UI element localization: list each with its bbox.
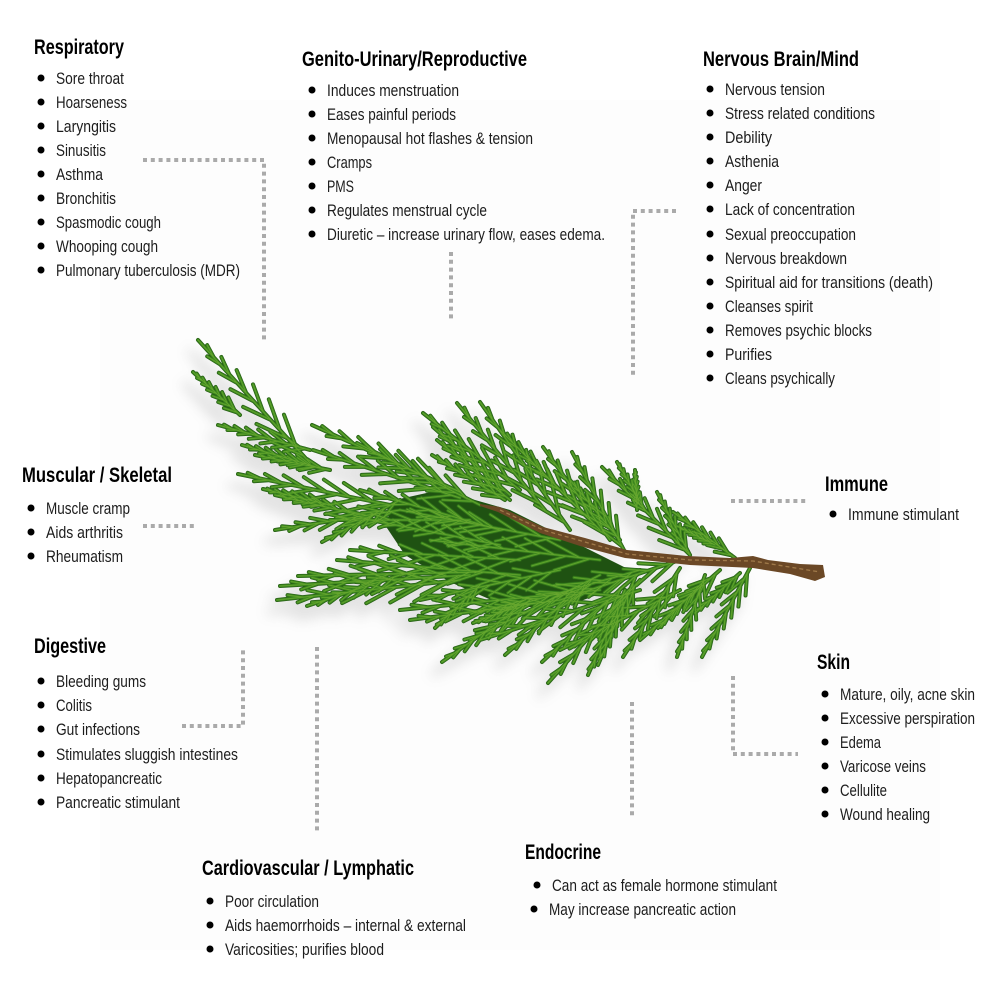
list: nervous: Stress related conditions — [725, 104, 875, 123]
panel: endocrine — [525, 841, 777, 919]
list: digestive: Hepatopancreatic — [56, 769, 162, 788]
connector: nervous — [633, 211, 676, 375]
connector: muscular — [143, 524, 194, 528]
list: nervous: Sexual preoccupation — [725, 225, 856, 244]
heading: genito-urinary: Genito-Urinary/Reproductive — [302, 48, 527, 71]
list: nervous — [706, 80, 933, 388]
panel: cardiovascular / lymphatic — [202, 857, 466, 959]
list: muscular: Rheumatism — [46, 547, 123, 566]
list: digestive: Pancreatic stimulant — [56, 793, 180, 812]
list: nervous: Nervous breakdown — [725, 249, 847, 268]
list: digestive: Colitis — [56, 696, 92, 715]
panel: digestive — [34, 635, 238, 812]
heading: nervous: Nervous Brain/Mind — [703, 48, 859, 71]
list: respiratory: Sinusitis — [56, 141, 106, 160]
list: respiratory: Hoarseness — [56, 93, 127, 112]
list: digestive: Stimulates sluggish intestines — [56, 745, 238, 764]
heading: cardiovascular: Cardiovascular / Lymphatic — [202, 857, 414, 880]
panel: immune — [825, 473, 959, 524]
list: genito-urinary: Regulates menstrual cycle — [327, 201, 487, 220]
list: skin — [822, 685, 975, 824]
list: skin: Edema — [840, 733, 881, 752]
list: endocrine: May increase pancreatic action — [549, 900, 736, 919]
list: respiratory: Pulmonary tuberculosis (MDR) — [56, 261, 240, 280]
list: nervous: Spiritual aid for transitions (death) — [725, 273, 933, 292]
list: muscular: Muscle cramp — [46, 499, 130, 518]
connector: digestive — [182, 647, 243, 726]
list: genito-urinary — [308, 81, 605, 244]
list: muscular — [28, 499, 130, 566]
heading: respiratory: Respiratory — [34, 36, 124, 59]
list: genito-urinary: Cramps — [327, 153, 372, 172]
list: nervous: Lack of concentration — [725, 200, 855, 219]
heading: endocrine: Endocrine — [525, 841, 601, 864]
heading: immune: Immune — [825, 473, 888, 496]
connector: immune — [731, 499, 806, 503]
heading: digestive: Digestive — [34, 635, 106, 658]
list: respiratory: Laryngitis — [56, 117, 116, 136]
list: nervous: Cleans psychically — [725, 369, 835, 388]
plant: cypress sprig — [179, 331, 825, 703]
list: endocrine: Can act as female hormone stimulant — [552, 876, 777, 895]
list: nervous: Anger — [725, 176, 762, 195]
list: nervous: Debility — [725, 128, 772, 147]
list: cardiovascular: Poor circulation — [225, 892, 319, 911]
list: cardiovascular: Aids haemorrhoids – internal & external — [225, 916, 466, 935]
panel: skin — [817, 651, 975, 824]
list: digestive: Gut infections — [56, 720, 140, 739]
connector: endocrine — [630, 702, 634, 818]
list: nervous: Purifies — [725, 345, 772, 364]
list: respiratory — [38, 69, 240, 280]
list: genito-urinary: Eases painful periods — [327, 105, 456, 124]
list: digestive — [38, 672, 238, 812]
list: digestive: Bleeding gums — [56, 672, 146, 691]
list: nervous: Removes psychic blocks — [725, 321, 872, 340]
connector: respiratory — [143, 160, 264, 341]
list: skin: Wound healing — [840, 805, 930, 824]
list: cardiovascular: Varicosities; purifies blood — [225, 940, 384, 959]
panel: muscular / skeletal — [22, 464, 172, 566]
connector: cardiovascular — [315, 647, 319, 831]
list: respiratory: Asthma — [56, 165, 103, 184]
panel: respiratory — [34, 36, 240, 280]
list: nervous: Nervous tension — [725, 80, 825, 99]
list: genito-urinary: PMS — [327, 177, 354, 196]
list: nervous: Cleanses spirit — [725, 297, 813, 316]
list: genito-urinary: Diuretic – increase urinary flow, eases edema. — [327, 225, 605, 244]
connector: skin — [733, 676, 798, 754]
list: immune: Immune stimulant — [848, 505, 959, 524]
list: cardiovascular — [206, 892, 466, 959]
connector: genito-urinary — [449, 252, 453, 320]
panel: genito-urinary / reproductive — [302, 48, 605, 244]
list: genito-urinary: Menopausal hot flashes & tension — [327, 129, 533, 148]
list: skin: Cellulite — [840, 781, 887, 800]
list: respiratory: Bronchitis — [56, 189, 116, 208]
list: respiratory: Spasmodic cough — [56, 213, 161, 232]
list: nervous: Asthenia — [725, 152, 779, 171]
list: respiratory: Sore throat — [56, 69, 124, 88]
list: muscular: Aids arthritis — [46, 523, 123, 542]
list: respiratory: Whooping cough — [56, 237, 158, 256]
list: genito-urinary: Induces menstruation — [327, 81, 459, 100]
stem — [480, 504, 825, 581]
list: skin: Varicose veins — [840, 757, 926, 776]
list: endocrine — [530, 876, 777, 919]
heading: skin: Skin — [817, 651, 850, 674]
panel: nervous brain/mind — [703, 48, 933, 388]
heading: muscular: Muscular / Skeletal — [22, 464, 172, 487]
